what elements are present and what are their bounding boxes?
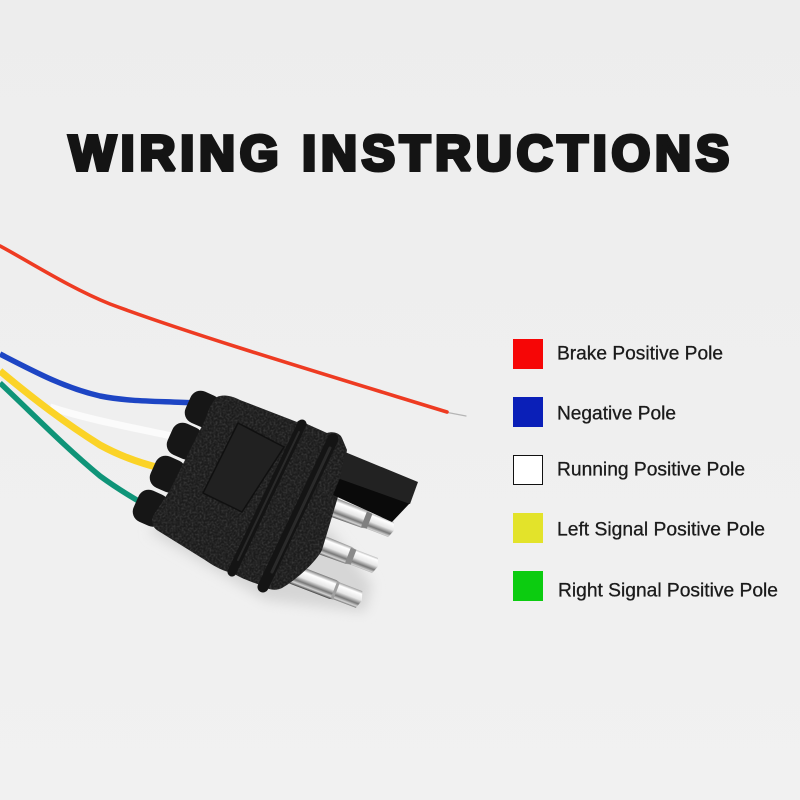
title: WIRING INSTRUCTIONS bbox=[69, 126, 729, 181]
legend bbox=[513, 339, 778, 602]
shadow under connector bbox=[150, 490, 372, 612]
legend item: running bbox=[514, 456, 745, 484]
wire stubs bbox=[129, 387, 224, 530]
raised panel bbox=[203, 423, 284, 512]
legend item: negative bbox=[513, 397, 676, 427]
connector body bbox=[152, 396, 347, 590]
red wire bbox=[0, 246, 466, 416]
tab recess bbox=[333, 478, 410, 522]
legend item: negative: Negative Pole bbox=[557, 404, 676, 424]
body texture bbox=[152, 396, 347, 590]
legend item: left signal: Left Signal Positive Pole bbox=[557, 520, 765, 540]
wire bundle bbox=[0, 354, 194, 503]
metal pins bbox=[286, 494, 397, 610]
legend item: running: Running Positive Pole bbox=[557, 460, 745, 480]
legend item: right signal: Right Signal Positive Pole bbox=[558, 580, 778, 602]
connector with wires bbox=[0, 354, 418, 612]
legend item: right signal bbox=[513, 571, 778, 602]
legend item: brake: Brake Positive Pole bbox=[557, 344, 723, 364]
legend item: left signal bbox=[513, 513, 765, 543]
ridge bands bbox=[232, 424, 333, 587]
legend item: brake bbox=[513, 339, 723, 369]
tab top bbox=[340, 452, 418, 504]
